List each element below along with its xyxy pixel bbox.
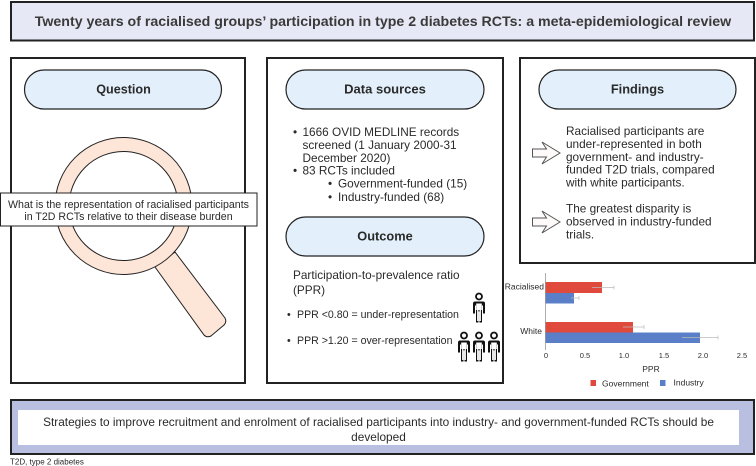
data sources list: Government-funded (15) (338, 176, 467, 190)
data sources list: December 2020) (302, 151, 390, 165)
outcome definition: (PPR) (293, 283, 325, 297)
heading: outcome (286, 217, 484, 256)
title: Twenty years of racialised groups’ participation in type 2 diabetes RCTs: a meta-epidemiological review (35, 14, 732, 30)
outcome thresholds: • (287, 335, 291, 347)
axis tick labels: 2.0 (698, 351, 708, 360)
data sources list: 1666 OVID MEDLINE records (302, 125, 459, 139)
outcome thresholds: • (287, 309, 291, 321)
outcome thresholds (287, 309, 459, 347)
axis title: PPR (642, 364, 660, 374)
data sources list: screened (1 January 2000-31 (302, 138, 457, 152)
outcome definition (293, 268, 460, 297)
axis tick labels: 1.5 (659, 351, 669, 360)
axis tick labels: 1.0 (619, 351, 629, 360)
axis tick labels: 0.5 (580, 351, 590, 360)
category labels: Racialised (505, 282, 544, 292)
data sources list: • (328, 176, 332, 190)
finding text two: observed in industry-funded (566, 214, 712, 228)
finding text one (565, 124, 715, 190)
category labels: White (520, 326, 542, 336)
finding text one: Racialised participants are (566, 124, 705, 138)
panel: question (0, 58, 257, 383)
icon: single person (473, 294, 485, 322)
legend: Government (602, 378, 649, 388)
heading: data sources: Data sources (344, 82, 426, 96)
title (11, 2, 754, 40)
finding text two (566, 202, 712, 242)
data sources list: • (328, 190, 332, 204)
legend: Industry (674, 378, 704, 388)
finding text one: with white participants. (565, 176, 685, 190)
heading: question: Question (96, 82, 151, 96)
finding text one: under-represented in both (566, 137, 702, 151)
finding text two: trials. (566, 228, 594, 242)
finding text one: government- and industry- (566, 150, 704, 164)
axis tick labels (544, 351, 747, 360)
outcome thresholds: PPR <0.80 = under-representation (297, 309, 459, 321)
outcome thresholds: PPR >1.20 = over-representation (297, 335, 453, 347)
question text box (0, 193, 257, 226)
data sources list: 83 RCTs included (302, 164, 395, 178)
heading: outcome: Outcome (357, 228, 413, 244)
outcome definition: Participation-to-prevalence ratio (293, 268, 460, 282)
icon: magnifying glass (62, 144, 226, 337)
bars: industry (545, 293, 700, 343)
heading: findings (539, 70, 736, 109)
question text box: What is the representation of racialised participants (8, 199, 249, 211)
conclusion banner (11, 400, 754, 454)
legend (590, 378, 704, 388)
icon: arrow (532, 211, 560, 233)
axis tick labels: 2.5 (737, 351, 747, 360)
icon: three people (458, 332, 500, 362)
data sources list: • (293, 164, 297, 178)
data sources list: Industry-funded (68) (338, 190, 444, 204)
data sources list: • (293, 125, 297, 139)
category labels (505, 282, 544, 336)
heading: data sources (286, 70, 484, 109)
panel: findings (520, 58, 755, 263)
bars: government (545, 282, 633, 332)
heading: question (24, 70, 222, 109)
panel: data sources and outcome (267, 58, 503, 383)
conclusion banner: Strategies to improve recruitment and enrolment of racialised participants into industry- and government-funded RCTs should be (43, 415, 714, 429)
finding text one: funded T2D trials, compared (566, 162, 715, 176)
icon: arrow (532, 142, 560, 164)
finding text two: The greatest disparity is (566, 202, 691, 216)
heading: findings: Findings (611, 82, 664, 96)
bar chart: PPR (505, 273, 747, 388)
axis tick labels: 0 (544, 351, 548, 360)
question text box: in T2D RCTs relative to their disease burden (24, 211, 233, 223)
data sources list (293, 125, 467, 204)
conclusion banner: developed (351, 430, 406, 444)
